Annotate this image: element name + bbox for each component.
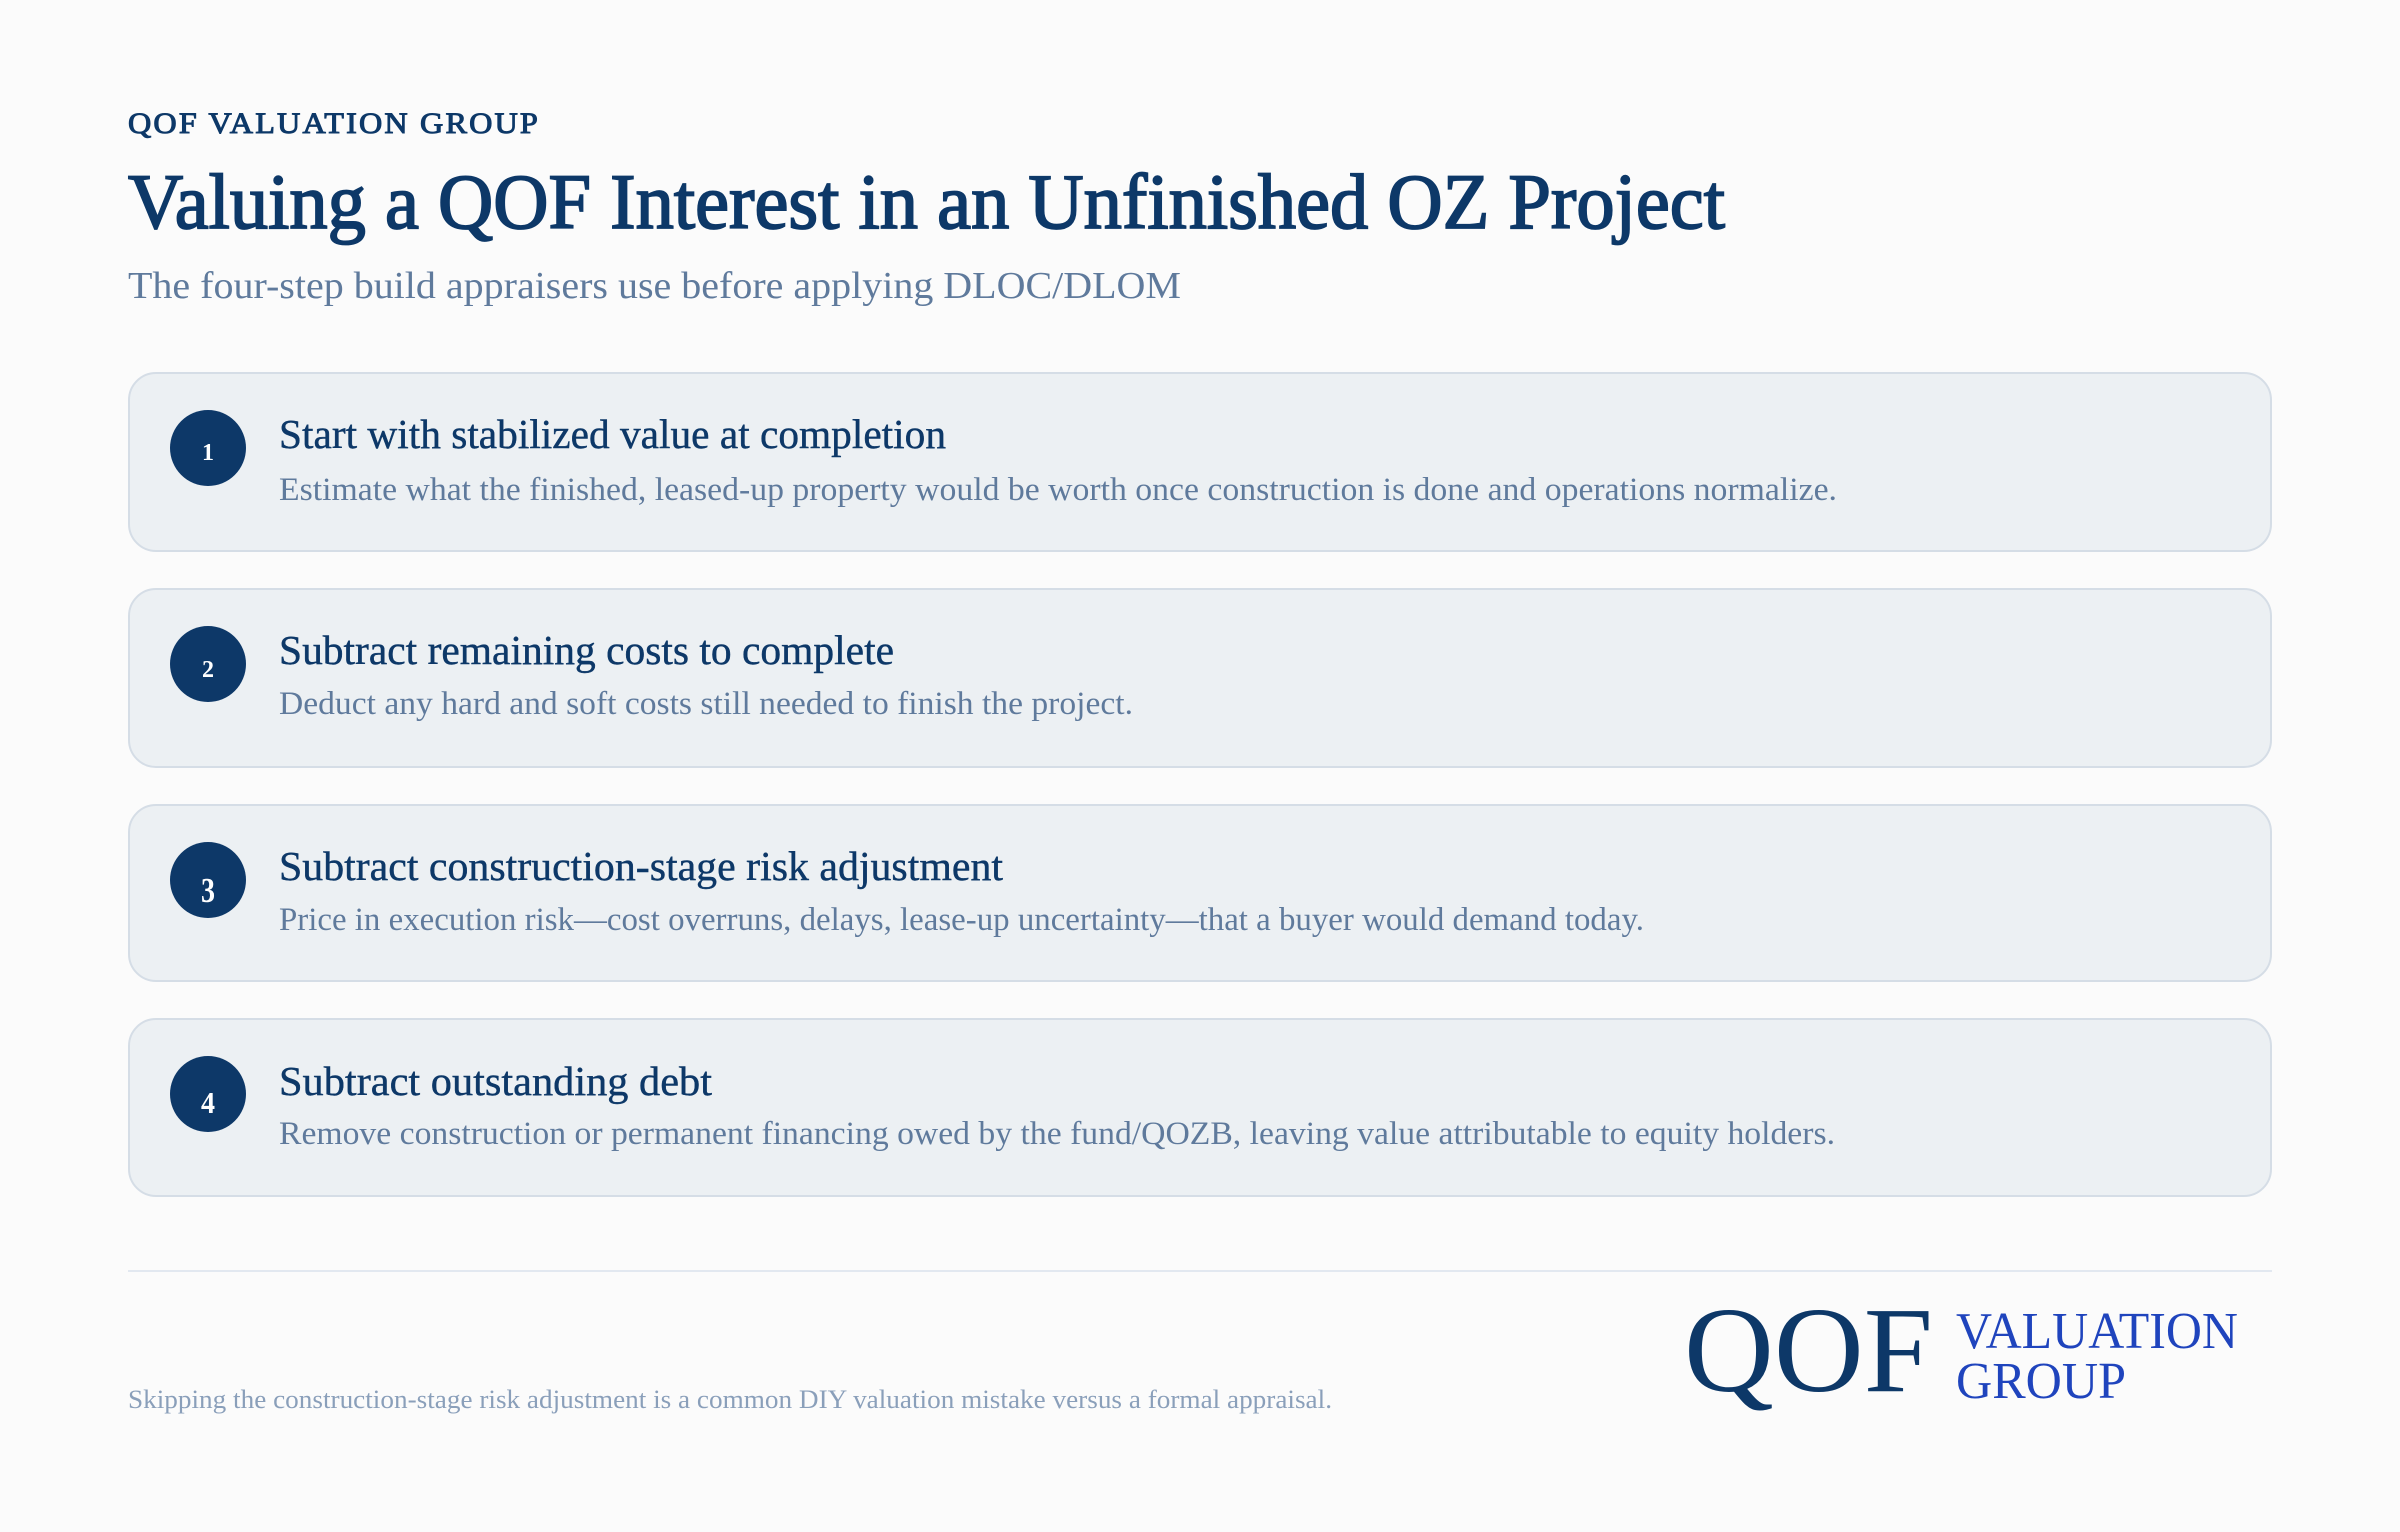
step 4 description: Remove construction or permanent financing owed by the fund/QOZB, leaving value attributable to equity holders.	[279, 1116, 1835, 1152]
card background	[129, 373, 2271, 551]
eyebrow: QOF VALUATION GROUP	[128, 107, 540, 140]
step 3 description: Price in execution risk—cost overruns, delays, lease-up uncertainty—that a buyer would demand today.	[279, 902, 1644, 938]
title: Valuing a QOF Interest in an Unfinished OZ Project	[128, 158, 1725, 245]
number badge 2	[170, 626, 246, 702]
step 2 heading: Subtract remaining costs to complete	[279, 627, 894, 673]
footer note: Skipping the construction-stage risk adjustment is a common DIY valuation mistake versus a formal appraisal.	[128, 1385, 1332, 1414]
header	[128, 107, 1725, 307]
number badge 3	[170, 842, 246, 918]
panel: step 4	[129, 1019, 2271, 1196]
number badge 1: 1	[202, 440, 214, 466]
logo wordmark line 1: VALUATION	[1956, 1303, 2238, 1360]
logo mark QOF: QOF	[1684, 1283, 1933, 1418]
step 1 description: Estimate what the finished, leased-up property would be worth once construction is done and operations normalize.	[279, 472, 1837, 508]
card background	[129, 1019, 2271, 1196]
number badge 1	[170, 410, 246, 486]
panel: step 3	[129, 805, 2271, 981]
panel: step 2	[129, 589, 2271, 767]
subtitle: The four-step build appraisers use before applying DLOC/DLOM	[128, 265, 1181, 307]
number badge 4	[170, 1056, 246, 1132]
logo	[1684, 1283, 2238, 1418]
card background	[129, 589, 2271, 767]
number badge 4: 4	[201, 1085, 215, 1120]
step 1 heading: Start with stabilized value at completion	[279, 411, 946, 457]
logo wordmark line 2: GROUP	[1956, 1353, 2126, 1410]
number badge 3: 3	[201, 871, 215, 910]
step 4 heading: Subtract outstanding debt	[279, 1058, 713, 1104]
card background	[129, 805, 2271, 981]
step 3 heading: Subtract construction-stage risk adjustment	[279, 843, 1004, 889]
panel: step 1	[129, 373, 2271, 551]
number badge 2: 2	[202, 657, 214, 683]
step 2 description: Deduct any hard and soft costs still needed to finish the project.	[279, 686, 1133, 722]
